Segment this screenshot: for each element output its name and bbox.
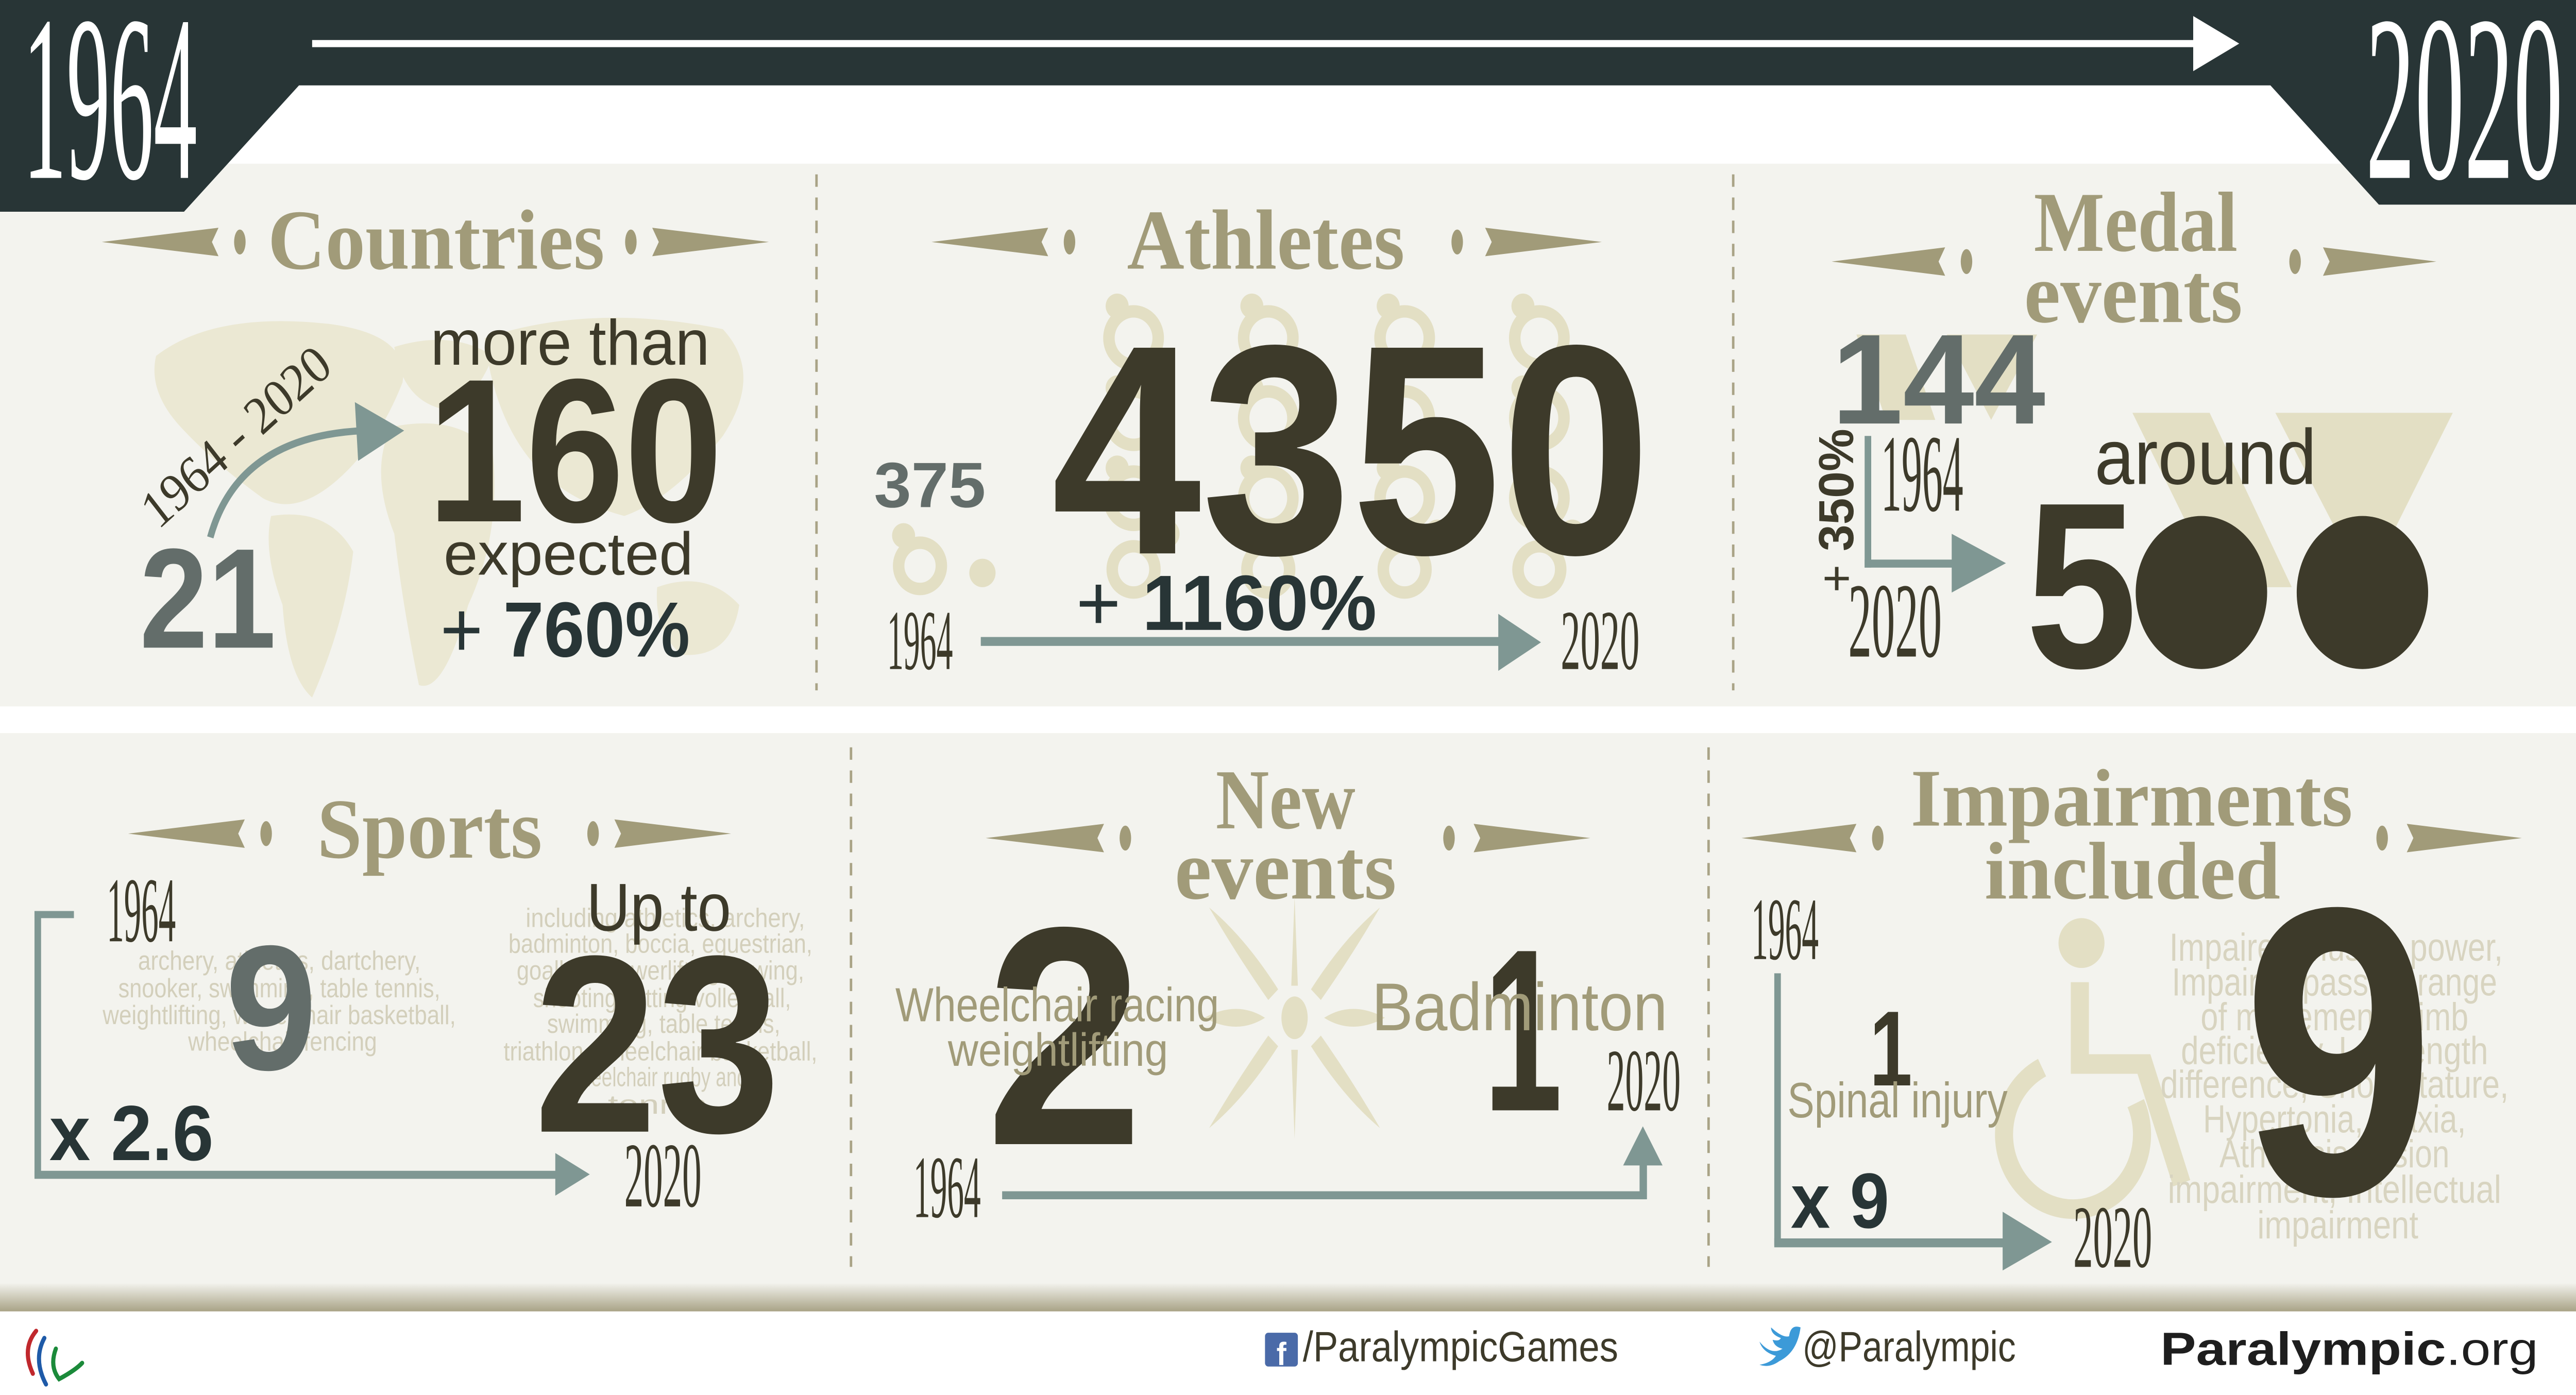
title: Medal events: events [2024,246,2243,341]
text facebook handle: /ParalympicGames [1303,1323,1618,1370]
list 1964 sports: snooker, swimming, table tennis, [118,973,440,1003]
list impairments: impairment, Intellectual [2168,1168,2501,1212]
text spinal injury: Spinal injury [1787,1073,2008,1128]
bracket arrow [35,911,590,1196]
icon: facebook [1265,1333,1298,1372]
list 2020 sports: triathlon, wheelchair basketball, [503,1036,817,1066]
list 2020 sports: tennis [608,1090,706,1120]
multiplier x9: x 9 [1791,1157,1889,1245]
title: Countries [102,193,769,287]
list 2020 sports: badminton, boccia, equestrian, [509,929,812,959]
panel: impairments: 1964 [1751,880,1819,978]
text: 2020 [1607,1031,1681,1130]
icon: twitter [1759,1326,1801,1366]
list impairments: Impaired passive range [2172,961,2497,1004]
panel: new events: 1964 [913,1138,981,1236]
panel: sports: 1964 [107,859,176,962]
title: New events: New [1216,752,1355,847]
multiplier x2.6: x 2.6 [49,1090,214,1177]
number 21: 21 [140,519,276,678]
panel: sports [35,781,817,1227]
number 500: 5 [2026,453,2138,718]
list 2020 sports: swimming, table tennis, [547,1009,781,1039]
number 9: 9 [225,909,317,1108]
list 2020 sports: goalball, powerlifting, rowing, [517,956,804,985]
list 1964 sports: weightlifting, wheelchair basketball, [102,1000,456,1030]
wheelchair icon [2004,918,2182,1209]
number 500 [2026,453,2428,718]
panel: athletes: 1964 [887,593,953,688]
world map [155,318,743,698]
number 1: 1 [1483,901,1563,1160]
text wheelchair racing weightlifting [895,979,1219,1076]
title: Sports [128,781,731,876]
number 23: 23 [534,904,781,1186]
list 1964 sports: wheelchair fencing [188,1027,377,1057]
list 2020 sports: shooting, sitting volleyball, [533,983,791,1013]
text Up to: Up to [586,870,731,945]
panel: countries [102,193,769,698]
curved arrow 1964-2020 [210,402,404,537]
list 2020 sports: wheelchair rugby and [566,1062,748,1092]
title: Medal events: Medal [2034,175,2238,269]
number 375: 375 [874,450,986,521]
elbow arrow [1002,1126,1663,1199]
title: Impairments included [1741,753,2522,917]
number 2: 2 [986,862,1143,1211]
number 9: 9 [2243,822,2435,1281]
list 2020 sports: including athletics, archery, [526,903,805,933]
list impairments: Athetosis, Vision [2219,1132,2449,1176]
icon: facebook: f [1277,1336,1287,1372]
header arrow [312,16,2239,71]
panel: athletes [874,193,1651,688]
list 2020 sports [503,903,817,1120]
text twitter handle: @Paralympic [1802,1323,2016,1370]
starburst icon [1204,897,1385,1139]
list impairments: difference, Short stature, [2160,1063,2509,1107]
icon: paralympic logo [28,1331,82,1384]
+350% rotated: + 350% [1809,429,1864,592]
text +1160%: + 1160% [1076,559,1377,647]
medal icon background [1856,334,2453,587]
title: Impairments included: included [1985,826,2280,917]
text wheelchair racing weightlifting: weightlifting [947,1025,1168,1076]
panel: medal events: 1964 [1881,412,1963,535]
panel: impairments [1741,753,2522,1286]
elbow arrow [1865,436,2006,592]
timeline arrow [981,614,1541,671]
text: more than: more than [430,308,710,379]
text: +760%: + 760% [440,586,690,673]
elbow arrow [1774,973,2052,1270]
number 144: 144 [1832,308,2045,451]
title: Athletes [931,193,1602,287]
list impairments: Impaired muscle power, [2170,926,2503,969]
header band [0,0,2576,229]
label 1964 - 2020 rotated: 1964 - 2020 [130,334,342,539]
text badminton: Badminton [1372,969,1668,1045]
title: New events: events [1175,823,1396,917]
panel: sports: 2020 [624,1125,702,1227]
list 1964 sports: archery, athletics, dartchery, [138,946,420,976]
list impairments: deficiency, Leg length [2181,1029,2488,1073]
panel: impairments: 2020 [2073,1188,2152,1286]
list impairments [2160,926,2509,1247]
title: Sports: Sports [317,781,542,876]
list impairments: of movement, Limb [2200,995,2468,1039]
footer [28,1323,2538,1384]
number 1: 1 [1870,989,1912,1109]
title: Athletes: Athletes [1127,193,1404,287]
list impairments: impairment [2257,1203,2418,1247]
text wheelchair racing weightlifting: Wheelchair racing [895,979,1219,1032]
panel: medal events: 2020 [1848,562,1942,680]
text: expected: expected [444,520,693,588]
title: New events [986,752,1590,917]
list impairments: Hypertonia, Ataxia, [2203,1098,2466,1141]
title: Countries: Countries [268,193,604,287]
number 160: 160 [427,337,723,565]
athlete icons background [899,311,1564,592]
number 4350: 4350 [1052,283,1651,617]
text around: around [2095,413,2316,501]
title: Medal events [1832,175,2436,341]
year 2020: 2020 [1561,593,1639,688]
panel: new events [895,752,1681,1236]
panel: medal events [1809,175,2453,718]
text website: Paralympic .org [2160,1323,2538,1375]
list 1964 sports [102,946,456,1057]
title: Impairments included: Impairments [1911,753,2352,844]
